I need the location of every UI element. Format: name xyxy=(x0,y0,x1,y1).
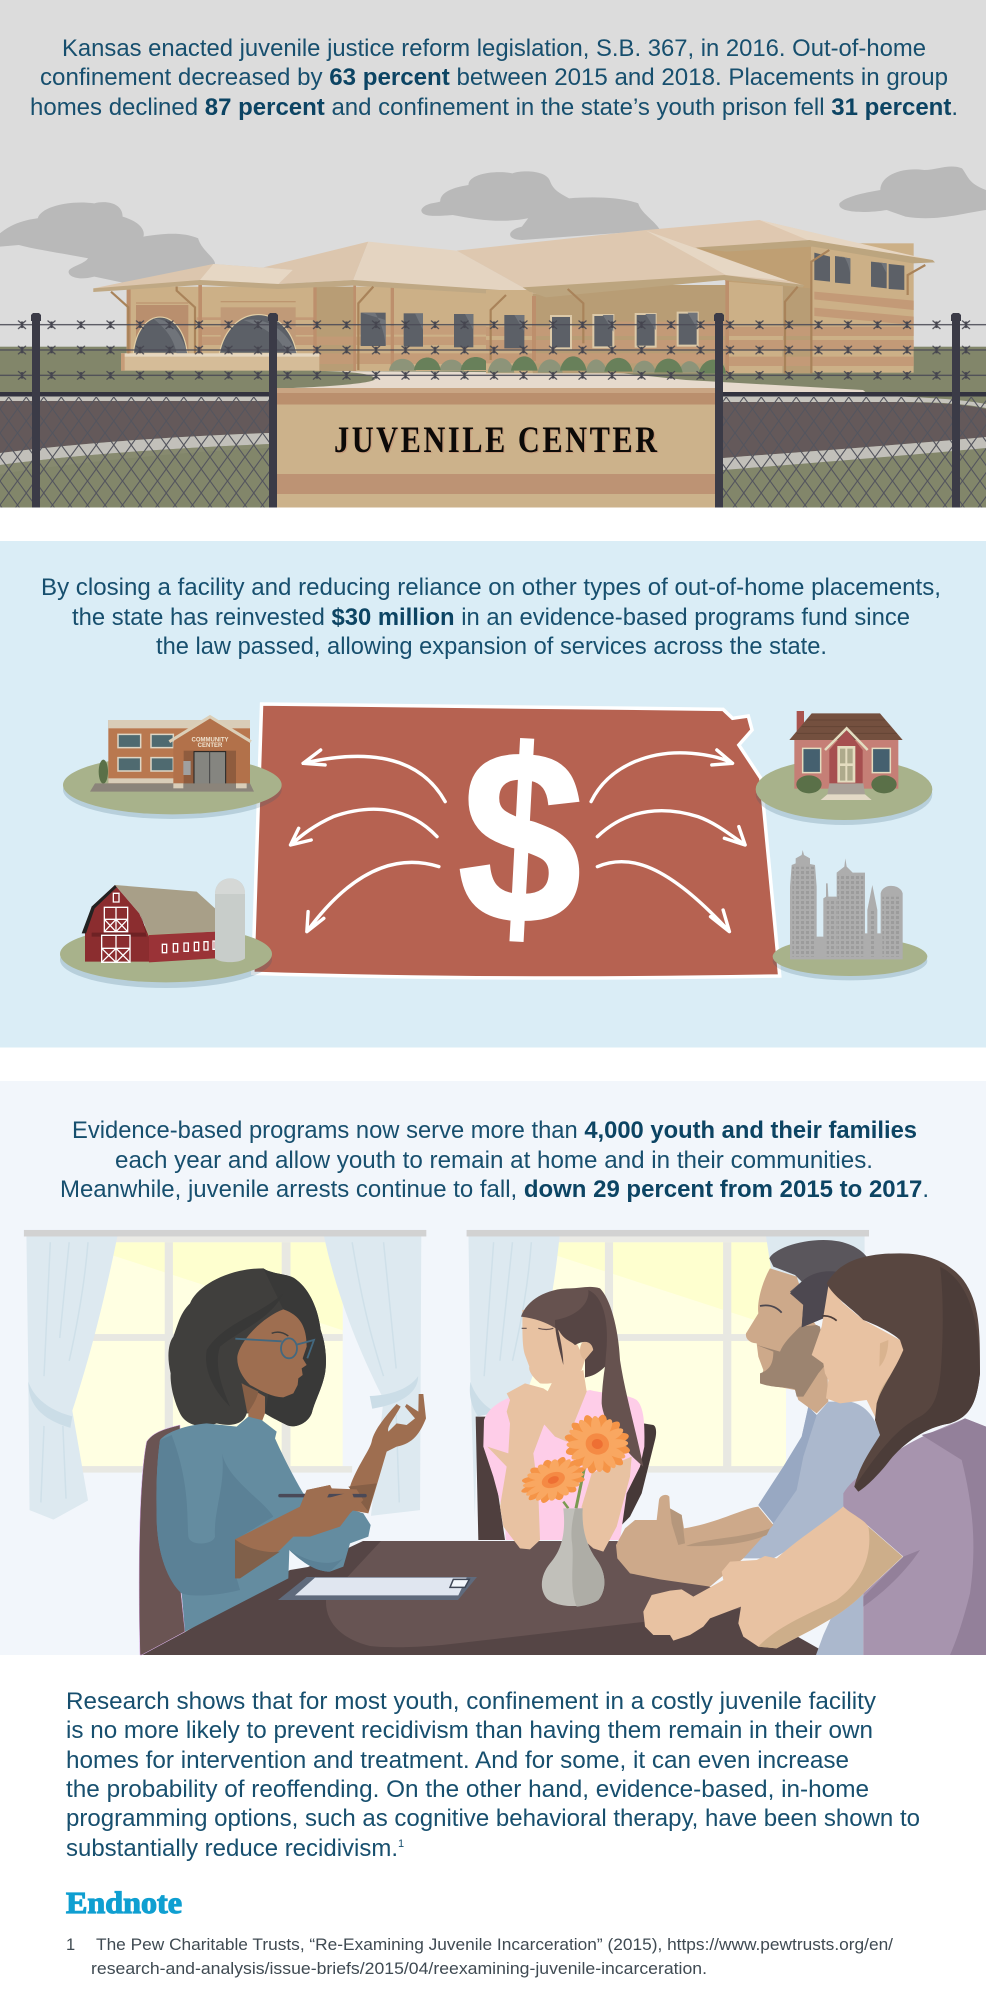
endnote citation: 1 xyxy=(66,1936,75,1954)
city skyline on island xyxy=(773,850,927,980)
roofs xyxy=(263,242,368,284)
raised arm xyxy=(350,1394,426,1513)
counselor xyxy=(139,1268,426,1655)
panel: research text xyxy=(66,1688,920,1978)
research paragraph: 1 xyxy=(398,1838,404,1850)
face xyxy=(812,1286,905,1434)
dollar sign: $ xyxy=(453,696,590,978)
research paragraph: Research shows that for most youth, confinement in a costly juvenile facility xyxy=(66,1688,877,1715)
bushes xyxy=(389,357,491,371)
community center label: COMMUNITY xyxy=(192,738,228,744)
research paragraph: the probability of reoffending. On the other hand, evidence-based, in-home xyxy=(66,1776,869,1803)
endnote citation: The Pew Charitable Trusts, “Re-Examining Juvenile Incarceration” (2015), https://www.pewtrusts.org/en/ xyxy=(96,1936,893,1954)
sign lettering: JUVENILE CENTER xyxy=(334,420,658,461)
clipboard xyxy=(278,1577,477,1600)
panel: juvenile center xyxy=(0,0,986,508)
research paragraph: is no more likely to prevent recidivism than having them remain in their own xyxy=(66,1717,873,1744)
woman in center xyxy=(476,1287,656,1607)
services text: each year and allow youth to remain at home and in their communities. xyxy=(115,1147,873,1174)
reinvestment text xyxy=(41,574,941,660)
clouds xyxy=(0,166,986,283)
windows and curtains xyxy=(24,1230,869,1520)
roofs xyxy=(646,220,934,262)
sign xyxy=(277,388,720,508)
reinvestment text: By closing a facility and reducing reliance on other types of out-of-home placements, xyxy=(41,574,941,601)
arm xyxy=(643,1500,903,1648)
barn and silo on island xyxy=(60,878,272,988)
hair xyxy=(168,1268,326,1426)
arched windows xyxy=(133,315,297,353)
endnote citation xyxy=(66,1936,893,1978)
intro text xyxy=(30,35,958,121)
community center label: CENTER xyxy=(198,743,223,749)
downspouts xyxy=(491,250,925,373)
heading: endnote: Endnote xyxy=(66,1885,182,1920)
intro text: confinement decreased by 63 percent between 2015 and 2018. Placements in group xyxy=(40,64,948,91)
research paragraph: programming options, such as cognitive behavioral therapy, have been shown to xyxy=(66,1805,920,1832)
man xyxy=(616,1240,880,1655)
right window xyxy=(467,1230,869,1518)
services text: Meanwhile, juvenile arrests continue to fall, down 29 percent from 2015 to 2017. xyxy=(60,1176,929,1203)
building: left wing xyxy=(93,242,546,371)
map: Kansas xyxy=(253,704,780,978)
house on island xyxy=(756,711,932,825)
hair xyxy=(827,1253,980,1492)
reinvestment text: the law passed, allowing expansion of services across the state. xyxy=(156,633,827,660)
shirt xyxy=(156,1417,371,1632)
hair xyxy=(521,1287,643,1467)
glasses xyxy=(235,1338,314,1358)
services text: Evidence-based programs now serve more than 4,000 youth and their families xyxy=(72,1117,917,1144)
bushes xyxy=(488,356,726,373)
shirt xyxy=(743,1402,880,1655)
chair xyxy=(476,1417,656,1540)
hair xyxy=(769,1240,867,1327)
lower windows xyxy=(361,313,473,347)
intro text: Kansas enacted juvenile justice reform legislation, S.B. 367, in 2016. Out-of-home xyxy=(62,35,926,62)
panel: reinvestment across the state xyxy=(0,541,986,1048)
fence xyxy=(0,313,986,508)
arrows xyxy=(291,750,745,932)
neck and face xyxy=(522,1310,593,1442)
shirt xyxy=(483,1390,644,1540)
vase xyxy=(542,1465,604,1607)
research paragraph: homes for intervention and treatment. And for some, it can even increase xyxy=(66,1747,849,1774)
intro text: homes declined 87 percent and confinement in the state’s youth prison fell 31 percent. xyxy=(30,94,958,121)
top xyxy=(843,1418,986,1655)
map of Kansas with arrows xyxy=(253,704,780,978)
woman at right xyxy=(643,1253,986,1655)
planter xyxy=(121,353,319,371)
sign lettering: JUVENILE CENTER xyxy=(335,421,659,462)
community center on island xyxy=(63,717,282,819)
reinvestment text: the state has reinvested $30 million in an evidence-based programs fund since xyxy=(72,604,910,631)
research paragraph: substantially reduce recidivism. xyxy=(66,1835,398,1862)
arms xyxy=(487,1383,632,1552)
chair xyxy=(139,1425,185,1655)
community center label xyxy=(192,738,228,749)
services text xyxy=(60,1117,929,1203)
arm and hands xyxy=(616,1495,773,1587)
neck and face xyxy=(746,1268,828,1413)
left window xyxy=(24,1230,426,1520)
forearm and hand with pen xyxy=(235,1485,365,1578)
research paragraph xyxy=(66,1688,920,1862)
flowers xyxy=(514,1408,636,1511)
building: right wing xyxy=(457,220,935,373)
neck and face xyxy=(237,1309,307,1427)
downspouts xyxy=(111,287,373,370)
panel: family services xyxy=(0,1081,986,1655)
endnote citation: research-and-analysis/issue-briefs/2015/04/reexamining-juvenile-incarceration. xyxy=(91,1960,707,1978)
ground and road xyxy=(0,347,986,508)
main windows xyxy=(504,253,904,348)
table xyxy=(142,1541,830,1655)
